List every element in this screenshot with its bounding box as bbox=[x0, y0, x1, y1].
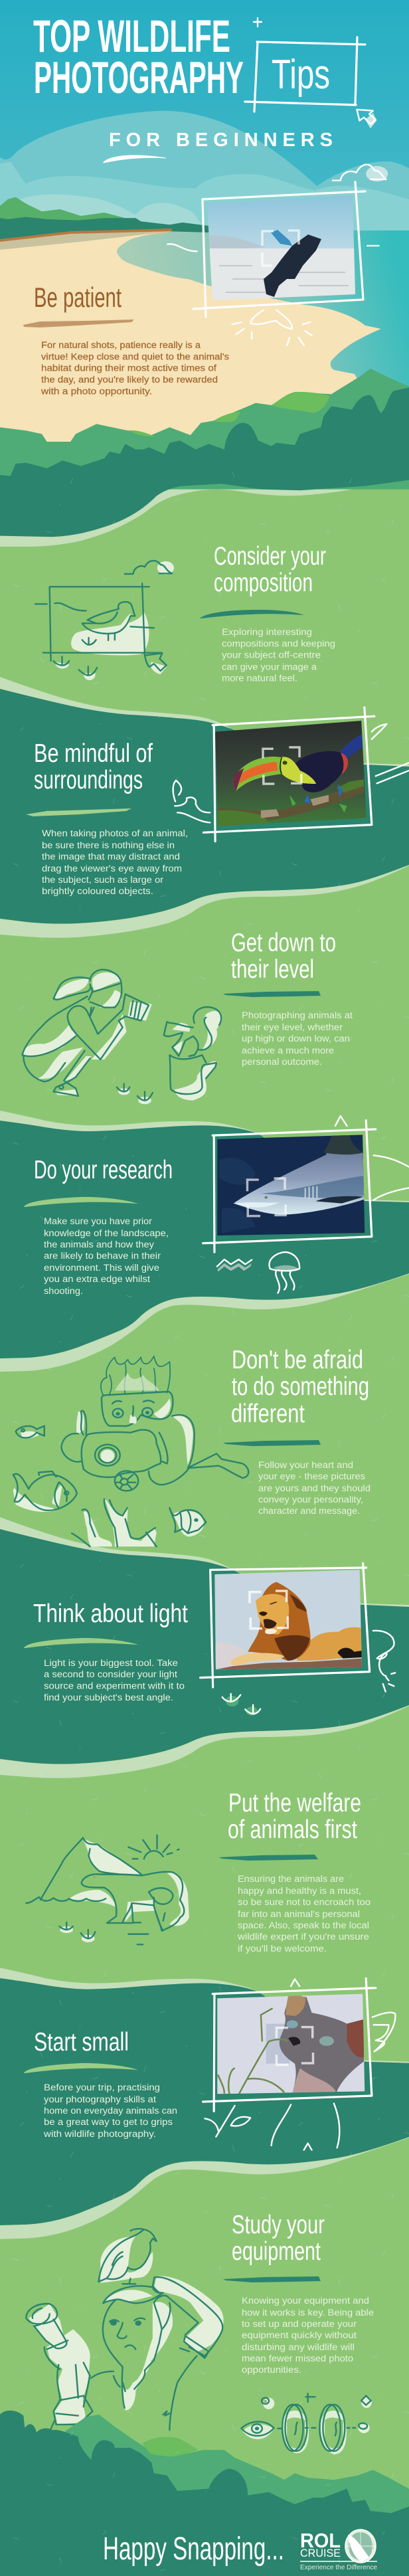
panel: do your research: shooting. bbox=[44, 1286, 83, 1296]
panel: study your equipment: how it works is key. Being able bbox=[242, 2308, 374, 2318]
panel: start small: your photography skills at bbox=[44, 2094, 156, 2104]
panel: start small bbox=[24, 2028, 177, 2139]
heading: don't be afraid bbox=[231, 1346, 369, 1428]
heading: be mindful of surroundings: Be mindful of bbox=[34, 739, 153, 768]
illustration: footer person peeking above forest bbox=[26, 2229, 224, 2430]
heading: put the welfare of animals first: Put the welfare bbox=[228, 1789, 361, 1817]
section 2 background: mindful of surroundings bbox=[0, 677, 409, 938]
panel: be mindful of surroundings: the subject, such as large or bbox=[42, 875, 164, 885]
photo: sphynx cat bbox=[203, 1978, 376, 2111]
subtitle: for beginners: FOR BEGINNERS bbox=[109, 130, 333, 151]
heading: don't be afraid: different bbox=[231, 1400, 305, 1428]
logo: ROL Cruise: Experience the Difference bbox=[300, 2564, 377, 2571]
panel: don't be afraid to do something different: character and message. bbox=[258, 1506, 360, 1516]
section 3 background: do your research bbox=[0, 1111, 409, 1372]
panel: be mindful of surroundings bbox=[26, 739, 188, 896]
heading: be mindful of surroundings: surroundings bbox=[34, 766, 143, 794]
heading: consider your composition: Consider your bbox=[214, 542, 326, 571]
panel: consider your composition: your subject off-centre bbox=[222, 650, 321, 660]
text: Be patient body: virtue! Keep close and quiet to the animal's bbox=[41, 351, 229, 361]
heading: Be patient bbox=[23, 282, 134, 327]
panel: do your research: are likely to behave in their bbox=[44, 1251, 161, 1261]
panel: do your research: the animals and how they bbox=[44, 1240, 154, 1249]
text: Be patient body: with a photo opportunity. bbox=[41, 386, 152, 396]
panel: get down to their level: Photographing animals at bbox=[242, 1010, 353, 1020]
logo: ROL Cruise bbox=[300, 2529, 377, 2571]
icon: hand-drawn marks around lion bbox=[222, 1631, 395, 1716]
panel: get down to their level: personal outcome. bbox=[242, 1057, 322, 1067]
heading: get down to their level bbox=[231, 929, 336, 984]
panel: start small: with wildlife photography. bbox=[43, 2129, 156, 2139]
panel: consider your composition: Exploring interesting bbox=[222, 627, 312, 637]
panel: get down to their level bbox=[223, 929, 353, 1067]
photo: whale bbox=[193, 182, 365, 317]
photo: toucan bbox=[203, 707, 374, 842]
panel: put the welfare of animals first: far into an animal's personal bbox=[238, 1909, 360, 1919]
text: Be patient body: the day, and you're likely to be rewarded bbox=[41, 375, 218, 385]
icon: jellyfish, waves and marks bbox=[217, 1116, 409, 1293]
heading: be mindful of surroundings bbox=[34, 739, 153, 794]
illustration: polar bear and mountain bbox=[26, 1835, 189, 1944]
panel: get down to their level: up high or down low, can bbox=[242, 1034, 350, 1044]
panel: do your research: environment. This will give bbox=[44, 1263, 159, 1273]
title bbox=[33, 11, 244, 103]
heading: Tips in frame bbox=[245, 18, 365, 112]
panel: consider your composition bbox=[200, 542, 335, 684]
panel: put the welfare of animals first: space. Also, speak to the local bbox=[238, 1920, 369, 1930]
panel: consider your composition: can give your image a bbox=[222, 662, 317, 672]
panel: don't be afraid to do something different: Follow your heart and bbox=[258, 1460, 353, 1470]
panel: do your research: you an extra edge whilst bbox=[44, 1274, 150, 1284]
heading: consider your composition: composition bbox=[214, 569, 313, 597]
panel: study your equipment: opportunities. bbox=[242, 2365, 301, 2375]
icon: hand-drawn marks around toucan bbox=[173, 724, 409, 822]
panel: don't be afraid to do something different: your eye - these pictures bbox=[258, 1471, 365, 1481]
text: Be patient body: For natural shots, patience really is a bbox=[41, 340, 201, 350]
section 7 background: start small bbox=[0, 1968, 409, 2239]
panel: put the welfare of animals first: wildlife expert if you're unsure bbox=[237, 1932, 369, 1942]
wave band: below header bbox=[0, 458, 409, 547]
illustration: crouching photographer and squirrel bbox=[22, 970, 222, 1104]
panel: think about light: source and experiment with it to bbox=[44, 1681, 185, 1691]
panel: think about light: find your subject's best angle. bbox=[44, 1693, 173, 1702]
panel: think about light: Light is your biggest tool. Take bbox=[44, 1658, 178, 1668]
heading: study your equipment: equipment bbox=[232, 2237, 321, 2266]
panel: study your equipment: equipment quickly without bbox=[242, 2330, 357, 2340]
icon: cursor bbox=[357, 110, 376, 128]
panel: be mindful of surroundings: be sure there is nothing else in bbox=[42, 840, 175, 850]
panel: consider your composition: more natural feel. bbox=[222, 674, 297, 684]
icon: whale tail splash bbox=[232, 310, 312, 345]
photo: shark bbox=[203, 1121, 376, 1252]
panel: put the welfare of animals first bbox=[219, 1789, 370, 1954]
panel: put the welfare of animals first: so be sure not to encroach too bbox=[238, 1897, 370, 1907]
panel: do your research: Make sure you have prior bbox=[44, 1216, 153, 1226]
panel: start small: home on everyday animals can bbox=[44, 2106, 177, 2116]
heading: start small: Start small bbox=[34, 2028, 129, 2057]
panel: beach header scene bbox=[0, 0, 409, 472]
section 5 background: think about light bbox=[0, 1517, 409, 1778]
panel: be mindful of surroundings: drag the viewer's eye away from bbox=[42, 864, 182, 874]
panel: study your equipment: Knowing your equipment and bbox=[242, 2296, 369, 2306]
heading: do your research: Do your research bbox=[34, 1156, 173, 1184]
panel: study your equipment: to set up and operate your bbox=[242, 2319, 357, 2329]
icon: eye and lenses diagram bbox=[241, 2393, 372, 2454]
title: PHOTOGRAPHY bbox=[34, 52, 244, 103]
icon: cloud and waves bbox=[167, 165, 388, 251]
photo: lion bbox=[201, 1563, 370, 1687]
heading: study your equipment bbox=[232, 2211, 325, 2266]
panel: get down to their level: achieve a much more bbox=[242, 1046, 334, 1056]
panel: think about light bbox=[24, 1600, 188, 1702]
panel: be mindful of surroundings: brightly coloured objects. bbox=[42, 886, 153, 896]
illustration: diver with camera, fish and coral bbox=[13, 1356, 248, 1546]
panel: get down to their level: their eye level, whether bbox=[242, 1022, 343, 1032]
panel: consider your composition: compositions and keeping bbox=[222, 638, 335, 648]
heading: put the welfare of animals first bbox=[228, 1789, 361, 1844]
panel: put the welfare of animals first: if you'll be welcome. bbox=[238, 1944, 327, 1954]
heading: Be patient: Be patient bbox=[34, 282, 122, 313]
panel: do your research: knowledge of the landscape, bbox=[44, 1228, 169, 1238]
panel: think about light: a second to consider your light bbox=[44, 1669, 177, 1679]
panel: do your research bbox=[24, 1156, 173, 1296]
heading: put the welfare of animals first: of animals first bbox=[228, 1815, 357, 1844]
panel: study your equipment bbox=[223, 2211, 374, 2375]
heading: don't be afraid: Don't be afraid bbox=[232, 1346, 363, 1374]
panel: study your equipment: mean fewer missed photo bbox=[242, 2353, 353, 2363]
panel: don't be afraid to do something different bbox=[223, 1346, 370, 1516]
panel: start small: be a great way to get to grips bbox=[44, 2117, 173, 2127]
heading: think about light: Think about light bbox=[33, 1600, 188, 1628]
panel: be mindful of surroundings: When taking photos of an animal, bbox=[42, 828, 188, 838]
icon: framed bird bbox=[35, 561, 174, 680]
panel: study your equipment: disturbing any wildlife will bbox=[242, 2342, 355, 2352]
panel: don't be afraid to do something different: are yours and they should bbox=[258, 1483, 370, 1493]
panel: put the welfare of animals first: Ensuring the animals are bbox=[238, 1874, 344, 1884]
text: happy snapping: Happy Snapping... bbox=[103, 2531, 284, 2567]
panel: be mindful of surroundings: the image that may distract and bbox=[42, 852, 180, 862]
logo: ROL Cruise: CRUISE bbox=[300, 2547, 341, 2559]
subtitle: for beginners bbox=[104, 130, 333, 163]
heading: consider your composition bbox=[214, 542, 326, 597]
forest: footer foreground bbox=[0, 2411, 409, 2576]
icon: hand-drawn marks around cat bbox=[204, 1979, 395, 2150]
panel: don't be afraid to do something different: convey your personality, bbox=[258, 1495, 363, 1505]
logo: ROL Cruise: ROL bbox=[300, 2529, 341, 2552]
forest: header foreground bbox=[0, 369, 409, 537]
panel: start small: Before your trip, practising bbox=[44, 2082, 160, 2092]
panel: put the welfare of animals first: happy and healthy is a must, bbox=[238, 1886, 361, 1896]
heading: get down to their level: Get down to bbox=[231, 929, 336, 957]
heading: study your equipment: Study your bbox=[232, 2211, 325, 2239]
title: TOP WILDLIFE bbox=[33, 11, 230, 62]
heading: Tips in frame: Tips bbox=[272, 52, 330, 98]
text: Be patient body bbox=[41, 340, 229, 396]
text: Be patient body: habitat during their most active times of bbox=[41, 363, 216, 373]
heading: get down to their level: their level bbox=[231, 955, 314, 984]
